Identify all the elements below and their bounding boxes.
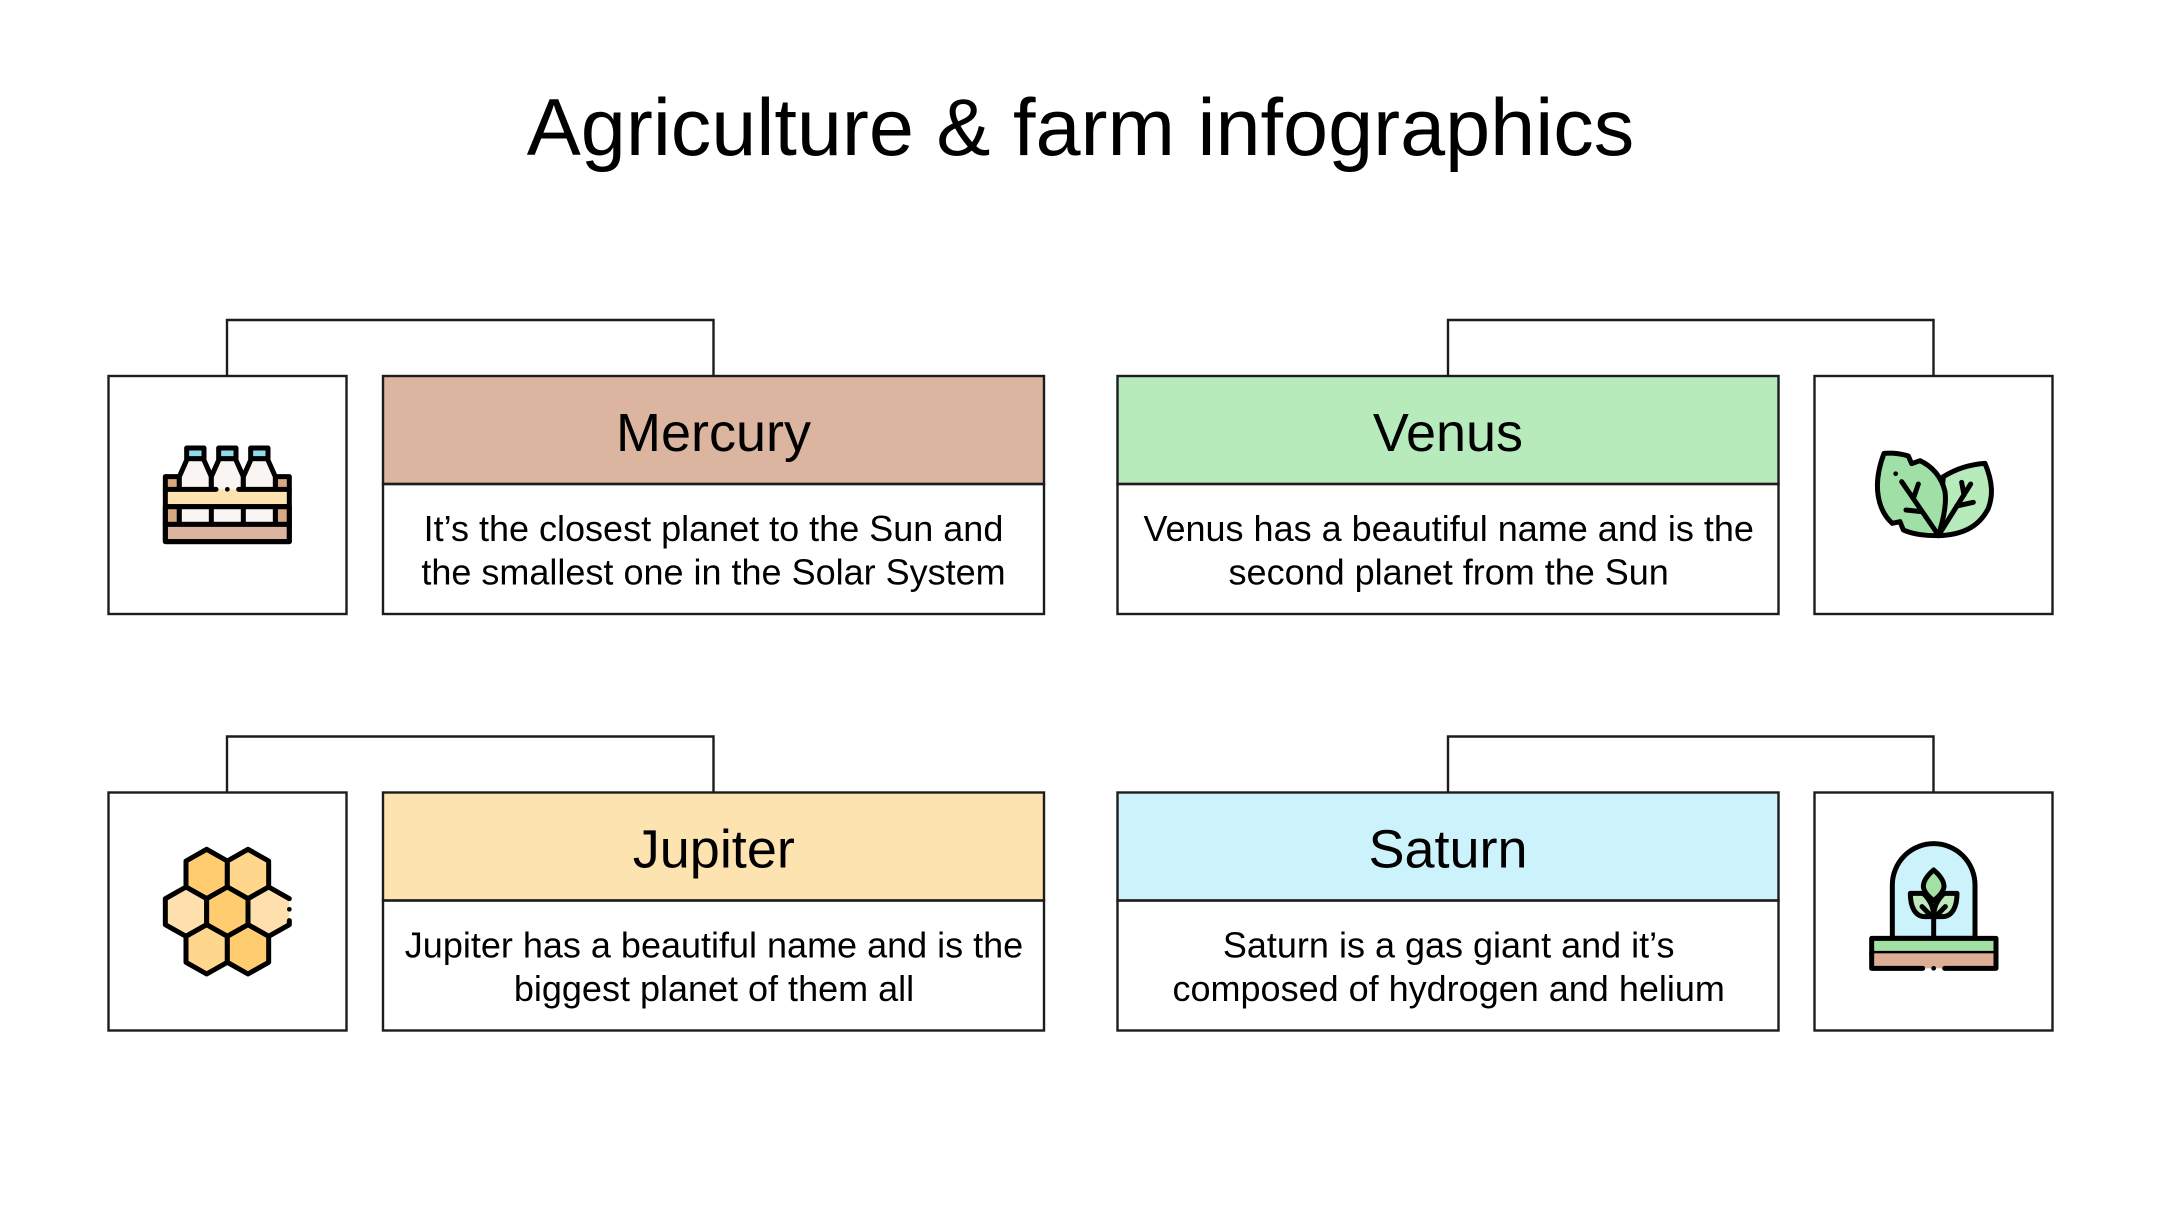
description: Mercury <box>383 484 1044 614</box>
connector: Jupiter <box>227 736 714 792</box>
icon box: Mercury <box>108 376 346 614</box>
description: Saturn <box>1118 900 1778 1030</box>
icon: greenhouse plant <box>1872 844 1996 971</box>
connector: Venus <box>1448 320 1934 376</box>
description: Mercury: the smallest one in the Solar System <box>421 552 1006 592</box>
description: Venus: second planet from the Sun <box>1229 552 1669 592</box>
icon box: Venus <box>1814 376 2052 614</box>
icon: honeycomb <box>165 849 292 974</box>
description: Venus: Venus has a beautiful name and is the <box>1143 508 1754 549</box>
description: Saturn: Saturn is a gas giant and it’s <box>1223 924 1675 966</box>
title: Agriculture & farm infographics <box>527 83 1634 173</box>
header: Jupiter <box>383 792 1044 900</box>
panel: Venus <box>1118 320 2052 614</box>
connector: Saturn <box>1448 736 1934 792</box>
header: Jupiter: Jupiter <box>633 820 795 880</box>
header: Saturn <box>1118 792 1778 900</box>
description: Jupiter: Jupiter has a beautiful name and is the <box>405 924 1023 966</box>
panel: Mercury <box>108 320 1044 614</box>
description: Venus <box>1118 484 1778 614</box>
panel: Saturn <box>1118 736 2052 1030</box>
header: Saturn: Saturn <box>1368 820 1528 880</box>
panel: Jupiter <box>108 736 1044 1030</box>
description: Mercury: It’s the closest planet to the Sun and <box>424 508 1003 549</box>
description: Jupiter: biggest planet of them all <box>514 968 914 1009</box>
description: Jupiter <box>383 900 1044 1030</box>
description: Saturn: composed of hydrogen and helium <box>1173 968 1725 1009</box>
header: Mercury <box>383 376 1044 484</box>
header: Mercury: Mercury <box>616 403 811 463</box>
connector: Mercury <box>227 320 714 376</box>
header: Venus: Venus <box>1373 403 1523 463</box>
icon: milk bottle crate <box>165 448 289 542</box>
icon box: Jupiter <box>108 792 346 1030</box>
header: Venus <box>1118 376 1778 484</box>
icon: leaves <box>1877 453 1991 536</box>
icon box: Saturn <box>1814 792 2052 1030</box>
